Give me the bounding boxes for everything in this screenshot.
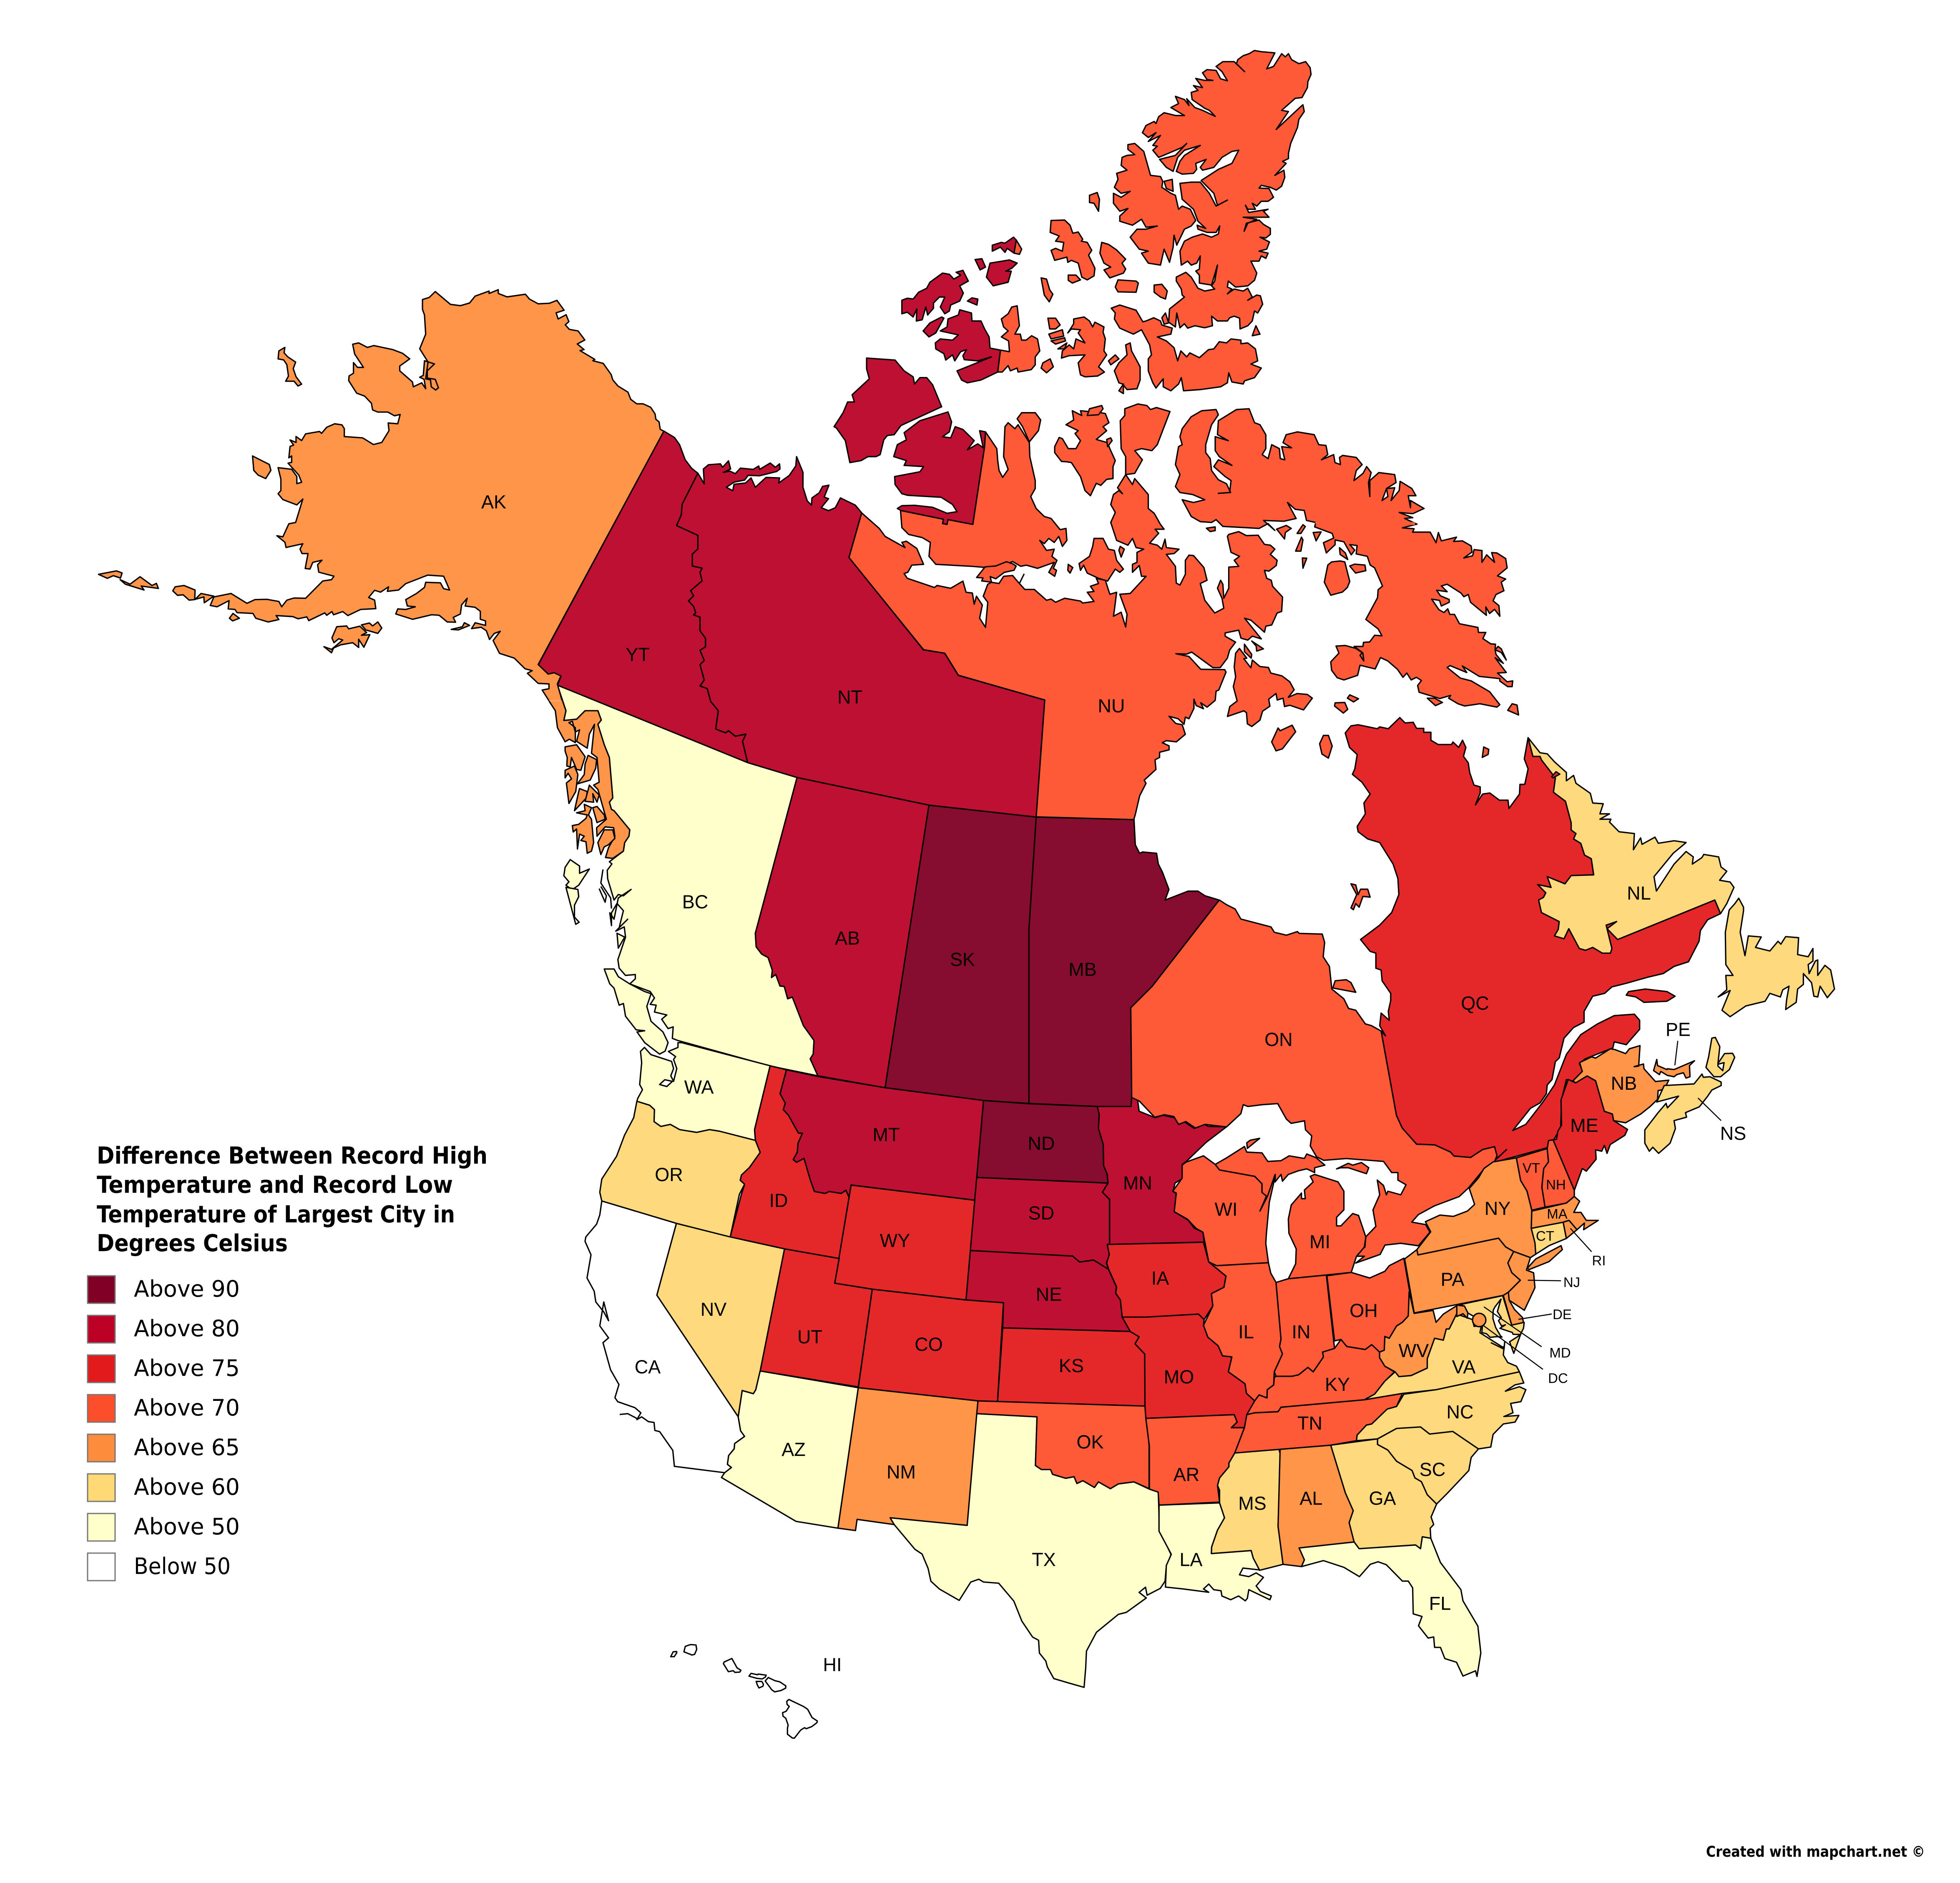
state and province labels: RI xyxy=(1592,1253,1606,1268)
ON and NU: James Bay islands xyxy=(1333,884,1370,992)
CT xyxy=(1531,1222,1566,1254)
state and province labels: MB xyxy=(1068,959,1097,980)
WA: Puget Sound xyxy=(660,1080,672,1086)
NT xyxy=(676,457,1045,817)
state and province labels: MN xyxy=(1123,1172,1152,1194)
Baffin seam cover xyxy=(1316,522,1415,525)
legend: Above 60 xyxy=(134,1474,240,1500)
PA xyxy=(1405,1238,1520,1313)
DC marker xyxy=(1473,1313,1486,1327)
WV: eastern panhandle xyxy=(1457,1305,1468,1318)
state and province labels: ME xyxy=(1570,1115,1598,1136)
YT xyxy=(538,431,748,763)
VA: tidewater inlet xyxy=(1491,1342,1505,1349)
VA xyxy=(1364,1314,1520,1400)
state and province labels: YT xyxy=(626,644,650,665)
OK xyxy=(977,1401,1149,1488)
MI: upper peninsula xyxy=(1215,1146,1325,1197)
state and province labels: KY xyxy=(1325,1374,1350,1395)
legend: Above 70 xyxy=(134,1395,240,1421)
state and province labels: NM xyxy=(887,1461,916,1483)
state and province labels: IN xyxy=(1292,1321,1310,1342)
legend: Above 90 xyxy=(134,1276,240,1302)
MT xyxy=(780,1070,984,1200)
Eastern Canada xyxy=(1131,718,1834,1263)
NU: Kent Peninsula island xyxy=(977,562,1016,582)
state and province labels: DE xyxy=(1553,1307,1572,1322)
state and province labels: AR xyxy=(1173,1464,1199,1485)
NU: mainland xyxy=(849,475,1283,820)
AK: panhandle islands xyxy=(565,745,615,855)
state and province labels: OH xyxy=(1349,1300,1378,1321)
NU: Axel Heiberg Island xyxy=(1113,143,1196,265)
VT xyxy=(1516,1149,1548,1210)
TN xyxy=(1235,1393,1402,1453)
Western Canada xyxy=(538,431,1219,1106)
state and province labels: OK xyxy=(1076,1431,1104,1453)
state and province labels: MD xyxy=(1549,1345,1571,1360)
WV xyxy=(1380,1292,1467,1377)
state and province labels: NC xyxy=(1446,1401,1474,1423)
state and province labels: WI xyxy=(1215,1199,1237,1220)
state and province labels: MO xyxy=(1164,1366,1194,1388)
WA xyxy=(637,1043,770,1140)
state and province labels: VT xyxy=(1523,1160,1540,1176)
state and province labels: KS xyxy=(1059,1355,1084,1376)
HI xyxy=(671,1644,817,1738)
legend: Above 75 xyxy=(134,1355,240,1381)
legend: Above 80 xyxy=(134,1315,240,1342)
Midwest and southeastern United States xyxy=(1107,1138,1526,1677)
MN xyxy=(1097,1096,1226,1244)
legend: Above 50 xyxy=(134,1513,240,1540)
Arctic Canada xyxy=(834,50,1424,820)
ID xyxy=(730,1066,849,1259)
BC xyxy=(558,685,818,1076)
NS: Bras d'Or xyxy=(1718,1063,1724,1071)
state and province labels: AL xyxy=(1299,1488,1323,1509)
state and province labels: NT xyxy=(837,686,862,708)
RI xyxy=(1563,1220,1577,1239)
SC xyxy=(1377,1427,1478,1504)
NL: Labrador xyxy=(1528,738,1734,953)
Western United States xyxy=(585,1043,1226,1687)
title: Degrees Celsius xyxy=(97,1230,288,1257)
state and province labels: MI xyxy=(1309,1231,1330,1252)
legend: Below 50 xyxy=(134,1553,231,1579)
title: Temperature and Record Low xyxy=(97,1172,453,1199)
PE xyxy=(1653,1059,1694,1078)
WI xyxy=(1173,1156,1275,1266)
state and province labels: ND xyxy=(1028,1133,1055,1154)
NC xyxy=(1357,1372,1526,1449)
state and province labels: DC xyxy=(1548,1370,1568,1386)
leader lines xyxy=(1483,1041,1721,1369)
state and province labels: HI xyxy=(823,1654,842,1675)
NS: mainland xyxy=(1645,1074,1721,1153)
IL xyxy=(1204,1262,1282,1401)
MB xyxy=(1029,817,1219,1106)
state and province labels: NH xyxy=(1546,1177,1566,1192)
MS xyxy=(1211,1449,1283,1570)
NU: Ellesmere Island xyxy=(1142,50,1311,329)
NU: small northern islands xyxy=(998,179,1261,394)
state and province labels: WA xyxy=(684,1076,714,1098)
state and province labels: GA xyxy=(1369,1488,1396,1509)
map of North America xyxy=(98,50,1834,1738)
title xyxy=(97,1142,487,1257)
DE xyxy=(1503,1292,1524,1325)
OR xyxy=(600,1101,760,1237)
MI: lower peninsula xyxy=(1288,1174,1366,1279)
state and province labels: NS xyxy=(1720,1123,1746,1144)
NY: Long Island xyxy=(1527,1246,1562,1270)
KY xyxy=(1247,1340,1395,1415)
state and province labels: CT xyxy=(1536,1228,1554,1244)
state and province labels: NB xyxy=(1611,1073,1637,1094)
QC xyxy=(1345,718,1721,1163)
title: Temperature of Largest City in xyxy=(97,1201,455,1228)
Mid-Atlantic detail xyxy=(1457,1296,1524,1353)
NH xyxy=(1542,1140,1574,1207)
FL xyxy=(1299,1537,1481,1677)
legend xyxy=(88,1276,240,1581)
ME xyxy=(1553,1076,1628,1190)
state and province labels: NY xyxy=(1485,1198,1510,1219)
state and province labels: AB xyxy=(835,928,860,949)
IA xyxy=(1107,1242,1226,1320)
UT xyxy=(760,1249,872,1387)
WY xyxy=(835,1185,975,1300)
state and province labels: NL xyxy=(1627,882,1651,904)
NY xyxy=(1417,1158,1536,1257)
SK xyxy=(885,805,1036,1104)
state and province labels: IL xyxy=(1238,1321,1254,1342)
CA: Channel Island xyxy=(620,1414,637,1418)
NL: Newfoundland xyxy=(1718,898,1834,1017)
MI: Isle Royale xyxy=(1247,1138,1260,1149)
KS xyxy=(998,1328,1146,1406)
state and province labels: WV xyxy=(1399,1340,1429,1361)
AK: islands xyxy=(98,347,470,653)
NU: Victoria and central islands xyxy=(900,404,1170,581)
state and province labels: QC xyxy=(1461,993,1489,1014)
CO xyxy=(858,1289,1003,1402)
NV xyxy=(657,1223,784,1417)
GA xyxy=(1331,1439,1437,1549)
state and province labels: NV xyxy=(701,1299,726,1320)
state and province labels: SK xyxy=(950,949,975,970)
NU: northern Baffin Island xyxy=(1176,409,1424,530)
state and province labels: IA xyxy=(1151,1267,1169,1289)
ON xyxy=(1131,900,1497,1263)
CA xyxy=(585,1201,745,1473)
state and province labels: AK xyxy=(481,491,506,513)
state and province labels: AZ xyxy=(781,1439,806,1460)
AL xyxy=(1278,1445,1354,1566)
AK: mainland xyxy=(210,290,664,701)
AR xyxy=(1146,1415,1244,1505)
MD xyxy=(1460,1296,1524,1353)
NE xyxy=(966,1250,1131,1332)
state and province labels: ID xyxy=(769,1190,788,1211)
QC: small notch on the Labrador border xyxy=(1552,772,1560,778)
state and province labels: NU xyxy=(1098,695,1125,716)
state and province labels: CA xyxy=(635,1356,661,1378)
state and province labels: BC xyxy=(682,891,708,913)
AZ xyxy=(721,1371,858,1528)
NU: Foxe Basin and Hudson Strait islands xyxy=(1206,525,1518,758)
NB xyxy=(1573,1046,1669,1123)
state and province labels: MS xyxy=(1238,1493,1266,1514)
NS: Cape Breton Island xyxy=(1706,1037,1735,1077)
state and province labels: PE xyxy=(1666,1019,1691,1040)
title: Difference Between Record High xyxy=(97,1142,487,1169)
OH xyxy=(1327,1258,1410,1352)
state and province labels: PA xyxy=(1441,1269,1464,1290)
state and province labels: NJ xyxy=(1563,1275,1580,1290)
NM xyxy=(838,1388,978,1531)
ND xyxy=(977,1101,1108,1183)
credit: Created with mapchart.net © xyxy=(1706,1843,1925,1860)
state and province labels: SC xyxy=(1420,1459,1445,1480)
state and province labels: WY xyxy=(880,1230,910,1251)
state and province labels: VA xyxy=(1452,1356,1475,1378)
state and province labels: NE xyxy=(1036,1284,1062,1305)
state and province labels: MT xyxy=(873,1124,900,1145)
MO xyxy=(1122,1314,1255,1428)
state and province labels: MA xyxy=(1547,1206,1568,1222)
AB xyxy=(755,777,929,1088)
QC: Anticosti Island xyxy=(1626,989,1675,1002)
LA xyxy=(1159,1503,1271,1601)
BC: islands xyxy=(564,860,668,1054)
state and province labels: ON xyxy=(1264,1029,1293,1050)
state and province labels: LA xyxy=(1179,1549,1203,1570)
NT: Queen Elizabeth islands xyxy=(834,237,1017,524)
NU: southern Baffin Island xyxy=(1314,523,1513,707)
state and province labels: SD xyxy=(1028,1202,1054,1224)
state and province labels: CO xyxy=(915,1334,943,1355)
state and province labels: TN xyxy=(1297,1413,1322,1434)
AK: mainland and islands xyxy=(98,290,664,701)
ON: Manitoulin Island xyxy=(1337,1163,1369,1174)
TX xyxy=(890,1414,1171,1687)
SD xyxy=(970,1177,1110,1269)
legend: Above 65 xyxy=(134,1434,240,1461)
state and province labels: UT xyxy=(797,1326,822,1348)
state and province labels: FL xyxy=(1429,1593,1451,1614)
state and province labels: TX xyxy=(1032,1549,1056,1570)
AK: panhandle xyxy=(549,701,630,858)
Northeastern United States and Maritimes xyxy=(1405,1037,1735,1325)
state and province labels xyxy=(481,491,1746,1675)
IN xyxy=(1274,1275,1334,1376)
Hudson Strait area xyxy=(1206,522,1518,758)
MA xyxy=(1531,1197,1598,1230)
NJ xyxy=(1508,1252,1535,1310)
state and province labels: OR xyxy=(655,1164,683,1185)
